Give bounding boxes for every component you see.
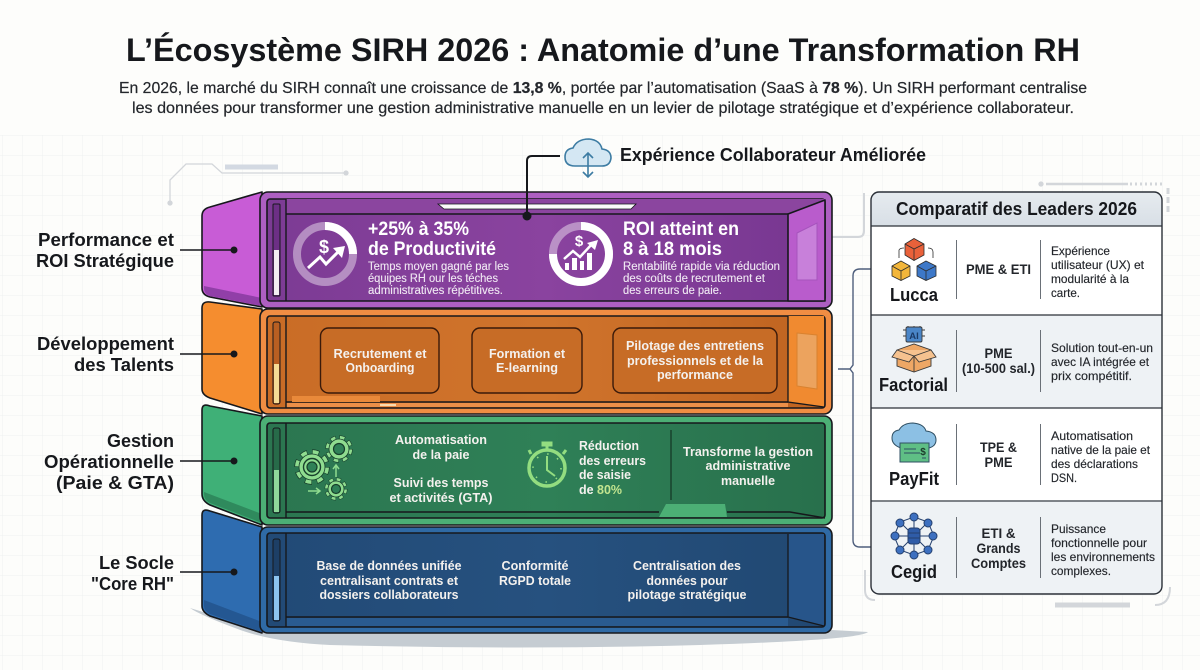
label: performance: Performance et <box>38 230 174 250</box>
row: Cegid: Comptes <box>971 556 1026 571</box>
stat: productivité: équipes RH our les téches <box>368 273 498 285</box>
layer: gestion opérationnelle (green) <box>202 405 832 525</box>
layer: performance et ROI (purple) <box>202 192 832 308</box>
icon: database network <box>891 513 937 559</box>
icon: AI box <box>892 326 936 372</box>
row: PayFit: Automatisation <box>1051 429 1133 443</box>
stat: productivité: administratives répétitives. <box>368 285 503 297</box>
stat: ROI: ROI atteint en <box>623 219 739 240</box>
text: centralisation: données pour <box>646 574 728 588</box>
text: base de données <box>316 559 462 602</box>
text: automatisation et GTA: et activités (GTA) <box>390 491 492 505</box>
label: gestion: Opérationnelle <box>44 452 174 472</box>
row: PayFit: PME <box>984 455 1012 470</box>
row: Cegid <box>891 513 1155 582</box>
stat: productivité: de Productivité <box>368 239 496 260</box>
icon: cloud payslip: $ <box>920 447 926 458</box>
label: gestion <box>44 431 238 493</box>
text: base de données: centralisant contrats et <box>320 574 459 588</box>
row: Cegid: Grands <box>976 541 1020 556</box>
row: Cegid: Cegid <box>891 562 937 582</box>
stat: productivité: +25% à 35% <box>368 219 469 240</box>
row: Factorial: prix compétitif. <box>1051 369 1132 383</box>
box: formation: Formation et <box>489 347 566 361</box>
box: formation <box>472 328 582 393</box>
row: PayFit: TPE & <box>980 440 1017 455</box>
text: automatisation et GTA: Automatisation <box>395 433 487 447</box>
row: Cegid: les environnements <box>1051 550 1155 564</box>
text: réduction des erreurs: de saisie <box>579 468 631 482</box>
panel: comparatif des leaders <box>871 192 1162 594</box>
label: performance: ROI Stratégique <box>36 251 174 271</box>
label: socle <box>91 553 238 594</box>
icon: gears <box>297 438 350 498</box>
box: formation: E-learning <box>496 361 558 375</box>
text: conformité RGPD <box>499 559 571 588</box>
label: gestion: (Paie & GTA) <box>56 473 174 493</box>
row: Lucca: carte. <box>1051 286 1080 300</box>
icon: cloud <box>565 139 611 177</box>
text: conformité RGPD: RGPD totale <box>499 574 571 588</box>
row: Lucca <box>890 238 1145 305</box>
table header: Comparatif des Leaders 2026 <box>896 199 1137 219</box>
label: talents: des Talents <box>74 355 174 375</box>
intro text: En 2026, le marché du SIRH connaît une croissance de 13,8 %, portée par l’automatisation (SaaS à 78 %). Un SIRH performant centralise <box>119 80 1087 97</box>
stat: ROI: des erreurs de paie. <box>623 285 722 297</box>
icon: ROI ring <box>553 226 609 282</box>
stat: ROI: des coûts de recrutement et <box>623 273 766 285</box>
text: centralisation: pilotage stratégique <box>628 588 747 602</box>
title: L’Écosystème SIRH 2026 : Anatomie d’une Transformation RH <box>126 32 1080 68</box>
row: PayFit: des déclarations <box>1051 457 1138 471</box>
label: gestion: Gestion <box>107 431 174 451</box>
icon: AI box: AI <box>909 331 919 342</box>
stat: productivité <box>368 219 509 297</box>
stat: ROI: Rentabilité rapide via réduction <box>623 261 780 273</box>
layer: core RH (blue) <box>202 510 832 633</box>
text: transforme la gestion: manuelle <box>721 474 775 488</box>
label: socle: Le Socle <box>99 553 174 573</box>
text: réduction des erreurs: des erreurs <box>579 454 646 468</box>
row: Cegid: ETI & <box>982 526 1016 541</box>
text: réduction des erreurs <box>579 439 646 497</box>
box: recrutement: Onboarding <box>346 361 414 375</box>
row: Lucca: Lucca <box>890 285 939 305</box>
row: Cegid: complexes. <box>1051 564 1111 578</box>
decorative circuit lines <box>168 164 1170 605</box>
row: PayFit <box>889 423 1151 489</box>
label: talents: Développement <box>37 334 174 354</box>
stat: productivité: Temps moyen gagné par les <box>368 261 509 273</box>
heading: expérience collaborateur: Expérience Collaborateur Améliorée <box>620 145 926 165</box>
text: automatisation et GTA: de la paie <box>412 448 470 462</box>
table header <box>871 192 1162 226</box>
text: base de données: dossiers collaborateurs <box>320 588 459 602</box>
connector: expérience collaborateur <box>524 156 560 220</box>
text: réduction des erreurs: Réduction <box>579 439 639 453</box>
text: centralisation: Centralisation des <box>633 559 741 573</box>
text: transforme la gestion <box>683 445 813 488</box>
row: Cegid: fonctionnelle pour <box>1051 536 1147 550</box>
intro text <box>119 80 1087 117</box>
box: recrutement <box>320 328 439 393</box>
row: PayFit: native de la paie et <box>1051 443 1151 457</box>
row: Factorial: PME <box>984 346 1012 361</box>
box: recrutement: Recrutement et <box>334 347 427 361</box>
row: Factorial: Factorial <box>879 375 948 395</box>
icon: productivity ring: $ <box>319 237 329 257</box>
text: transforme la gestion: Transforme la gestion <box>683 445 813 459</box>
stat: ROI: 8 à 18 mois <box>623 239 722 260</box>
box: pilotage: performance <box>657 368 733 382</box>
label: performance <box>36 230 238 271</box>
row: PayFit: PayFit <box>889 469 939 489</box>
box: pilotage <box>613 328 777 393</box>
text: base de données: Base de données unifiée <box>316 559 462 573</box>
icon: cloud payslip <box>892 423 936 462</box>
text: conformité RGPD: Conformité <box>502 559 569 573</box>
row: Lucca: modularité à la <box>1051 272 1129 286</box>
icon: cubes <box>892 238 936 280</box>
label: talents <box>37 334 238 375</box>
row: Lucca: utilisateur (UX) et <box>1051 258 1145 272</box>
icon: ROI ring: $ <box>575 233 584 250</box>
label: socle: "Core RH" <box>91 574 174 594</box>
row: Factorial: (10-500 sal.) <box>962 361 1035 376</box>
text: automatisation et GTA <box>390 433 492 505</box>
box: pilotage: Pilotage des entretiens <box>626 339 764 353</box>
base shadow <box>190 608 868 648</box>
row: Factorial <box>879 326 1153 395</box>
box: pilotage: professionnels et de la <box>627 354 764 368</box>
text: automatisation et GTA: Suivi des temps <box>394 476 489 490</box>
icon: stopwatch <box>529 442 566 486</box>
row: Factorial: Solution tout-en-un <box>1051 341 1153 355</box>
text: centralisation <box>628 559 747 602</box>
row: PayFit: DSN. <box>1051 471 1077 485</box>
row: Lucca: PME & ETI <box>966 262 1031 277</box>
row: Cegid: Puissance <box>1051 522 1106 536</box>
row: Factorial: avec IA intégrée et <box>1051 355 1150 369</box>
bracket to comparison table <box>838 269 871 547</box>
row: Lucca: Expérience <box>1051 244 1110 258</box>
text: transforme la gestion: administrative <box>706 459 791 473</box>
stat: ROI <box>623 219 780 297</box>
text: réduction des erreurs: de 80% <box>579 483 622 497</box>
intro text: les données pour transformer une gestion administrative manuelle en un levier de pilotage stratégique et d’expérience collaborateur. <box>132 100 1074 117</box>
layer: développement des talents (orange) <box>202 302 832 414</box>
icon: productivity ring <box>297 226 353 282</box>
